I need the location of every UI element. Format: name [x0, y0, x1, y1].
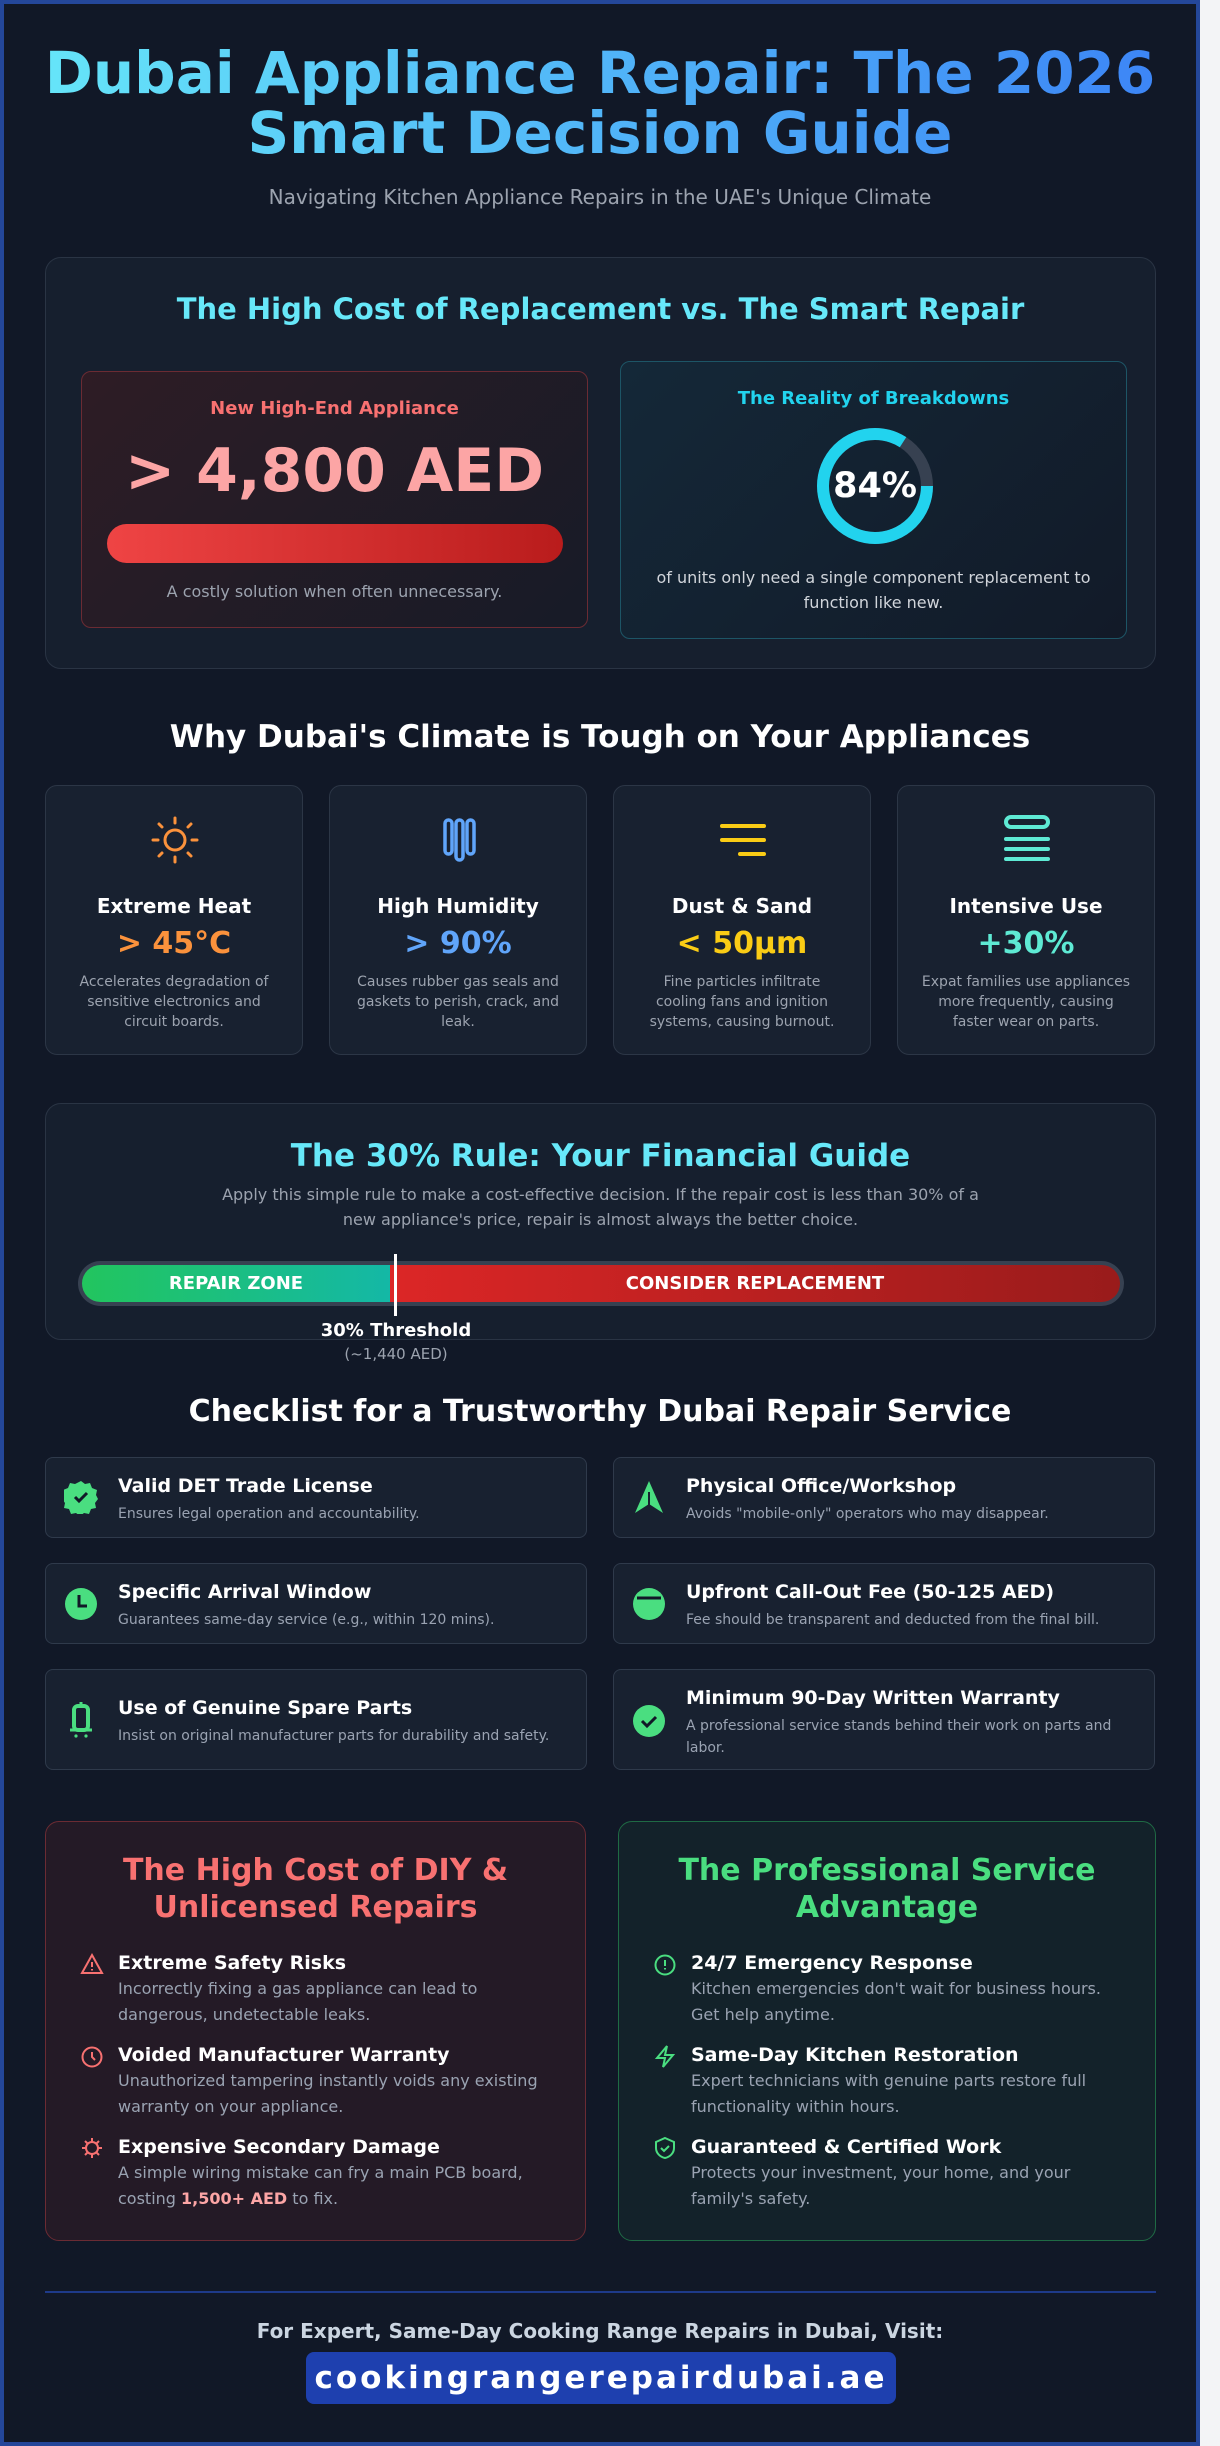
replacement zone: CONSIDER REPLACEMENT: [626, 1273, 884, 1294]
icon: stack: [1004, 815, 1050, 861]
icon: shield: [655, 2136, 675, 2159]
repair zone: [82, 1265, 390, 1302]
heading: [678, 1853, 1096, 1925]
threshold label: [321, 1320, 471, 1363]
icon: bolt: [655, 2045, 675, 2068]
icon: coin: [633, 1588, 665, 1620]
icon: part: [70, 1702, 92, 1738]
item: warranty: [82, 2044, 538, 2116]
card: extreme heat: Accelerates degradation of sensitive electronics and circuit boards.: [80, 974, 268, 1030]
heading: The High Cost of Replacement vs. The Smart Repair: [177, 292, 1024, 326]
checklist: genuine parts: Use of Genuine Spare Parts: [118, 1697, 412, 1719]
icon: humidity: [443, 818, 476, 862]
item: same-day: [655, 2044, 1086, 2116]
card: humidity: [329, 785, 587, 1055]
card: humidity: Causes rubber gas seals and gaskets to perish, crack, and leak.: [357, 974, 559, 1030]
caption: of units only need a single component replacement to function like new.: [656, 568, 1090, 612]
footer url button: [306, 2352, 896, 2404]
card: dust: [613, 785, 871, 1055]
item: damage: Expensive Secondary Damage: [118, 2136, 440, 2158]
checklist: office: Avoids "mobile-only" operators who may disappear.: [686, 1506, 1049, 1522]
threshold marker: [394, 1254, 397, 1316]
item: emergency: [654, 1952, 1101, 2024]
panel: 30% rule: [45, 1103, 1156, 1340]
cost bar: [107, 524, 563, 563]
donut chart 84%: [817, 428, 933, 544]
heading: climate: Why Dubai's Climate is Tough on Your Appliances: [170, 719, 1030, 755]
footer url button: cookingrangerepairdubai.ae: [314, 2360, 888, 2396]
card: extreme heat: > 45°C: [117, 926, 231, 961]
checklist: office: Physical Office/Workshop: [686, 1475, 956, 1497]
card: extreme heat: Extreme Heat: [97, 894, 251, 918]
item: warranty: Unauthorized tampering instantly voids any existing warranty on your appliance.: [118, 2071, 538, 2116]
heading: [123, 1853, 508, 1925]
card: dust: < 50µm: [677, 926, 807, 961]
icon: alert circle: [654, 1954, 676, 1976]
description: Apply this simple rule to make a cost-effective decision. If the repair cost is less than 30% of a new appliance's price, repair is almost always the better choice.: [222, 1185, 979, 1229]
icon: clock: [65, 1588, 97, 1620]
icon: arrow: [635, 1481, 663, 1513]
icon: badge check: [64, 1481, 98, 1514]
item: damage: [82, 2136, 523, 2208]
card: new appliance cost: [81, 371, 588, 628]
footer text: For Expert, Same-Day Cooking Range Repairs in Dubai, Visit:: [257, 2319, 943, 2343]
card: breakdown reality: [620, 361, 1127, 639]
card: extreme heat: [45, 785, 303, 1055]
item: certified: [655, 2136, 1070, 2208]
card: intensive use: Intensive Use: [949, 894, 1103, 918]
threshold bar: [78, 1261, 1124, 1306]
item: same-day: Expert technicians with genuine parts restore full functionality within hours.: [691, 2071, 1086, 2116]
heading: Advantage: [796, 1890, 978, 1925]
item: warranty: Voided Manufacturer Warranty: [118, 2044, 450, 2066]
replacement zone: [390, 1265, 1120, 1302]
card: dust: Fine particles infiltrate cooling fans and ignition systems, causing burnout.: [650, 974, 834, 1030]
card: intensive use: +30%: [978, 926, 1074, 961]
threshold label: (~1,440 AED): [344, 1345, 448, 1363]
label: New High-End Appliance: [210, 398, 459, 419]
checklist: office: [613, 1457, 1155, 1538]
repair zone: REPAIR ZONE: [169, 1273, 303, 1294]
checklist: arrival window: Specific Arrival Window: [118, 1581, 371, 1603]
heading: The High Cost of DIY &: [123, 1853, 508, 1888]
item: emergency: Kitchen emergencies don't wait for business hours. Get help anytime.: [691, 1979, 1101, 2024]
threshold label: 30% Threshold: [321, 1320, 471, 1341]
title: Smart Decision Guide: [248, 99, 952, 167]
item: safety: Incorrectly fixing a gas appliance can lead to dangerous, undetectable leaks.: [118, 1979, 477, 2024]
icon: chip: [82, 2138, 102, 2158]
caption: A costly solution when often unnecessary.: [167, 582, 502, 601]
heading: Unlicensed Repairs: [154, 1890, 478, 1925]
card: intensive use: Expat families use appliances more frequently, causing faster wear on parts.: [922, 974, 1130, 1030]
subtitle: Navigating Kitchen Appliance Repairs in the UAE's Unique Climate: [269, 185, 931, 209]
checklist: call-out fee: Fee should be transparent and deducted from the final bill.: [686, 1612, 1099, 1628]
card: humidity: > 90%: [404, 926, 512, 961]
checklist: warranty: A professional service stands behind their work on parts and labor.: [686, 1718, 1111, 1756]
panel: professional advantage: [618, 1821, 1156, 2241]
title: [4, 43, 1196, 163]
icon: sun: [152, 816, 198, 864]
card: dust: Dust & Sand: [672, 894, 812, 918]
icon: warning: [80, 1953, 104, 1974]
heading: checklist: Checklist for a Trustworthy Dubai Repair Service: [189, 1394, 1011, 1429]
item: safety: [80, 1952, 477, 2024]
panel: replacement vs repair: [45, 257, 1156, 669]
checklist: arrival window: Guarantees same-day service (e.g., within 120 mins).: [118, 1612, 494, 1628]
heading: The Professional Service: [678, 1853, 1096, 1888]
checklist: warranty: [613, 1669, 1155, 1770]
donut chart 84%: 84%: [833, 466, 917, 506]
checklist: call-out fee: [613, 1563, 1155, 1644]
item: safety: Extreme Safety Risks: [118, 1952, 346, 1974]
icon: dust lines: [720, 824, 766, 856]
checklist: call-out fee: Upfront Call-Out Fee (50-125 AED): [686, 1581, 1054, 1603]
icon: clock: [82, 2046, 102, 2068]
card: humidity: High Humidity: [377, 894, 539, 918]
checklist: genuine parts: Insist on original manufacturer parts for durability and safety.: [118, 1728, 549, 1744]
checklist: DET license: Valid DET Trade License: [118, 1475, 373, 1497]
checklist: genuine parts: [45, 1669, 587, 1770]
item: same-day: Same-Day Kitchen Restoration: [691, 2044, 1019, 2066]
icon: check circle: [633, 1705, 665, 1737]
item: damage: A simple wiring mistake can fry a main PCB board, costing 1,500+ AED to fix.: [118, 2163, 523, 2208]
card: intensive use: [897, 785, 1155, 1055]
checklist: warranty: Minimum 90-Day Written Warranty: [686, 1687, 1060, 1709]
item: certified: Guaranteed & Certified Work: [691, 2136, 1001, 2158]
title: Dubai Appliance Repair: The 2026: [45, 39, 1155, 107]
panel: DIY risks: [45, 1821, 586, 2241]
checklist: arrival window: [45, 1563, 587, 1644]
item: emergency: 24/7 Emergency Response: [691, 1952, 973, 1974]
checklist: DET license: [45, 1457, 587, 1538]
label: The Reality of Breakdowns: [738, 388, 1009, 409]
item: certified: Protects your investment, your home, and your family's safety.: [691, 2163, 1070, 2208]
big number: > 4,800 AED: [125, 436, 544, 506]
heading: The 30% Rule: Your Financial Guide: [291, 1138, 910, 1174]
checklist: DET license: Ensures legal operation and accountability.: [118, 1506, 420, 1522]
